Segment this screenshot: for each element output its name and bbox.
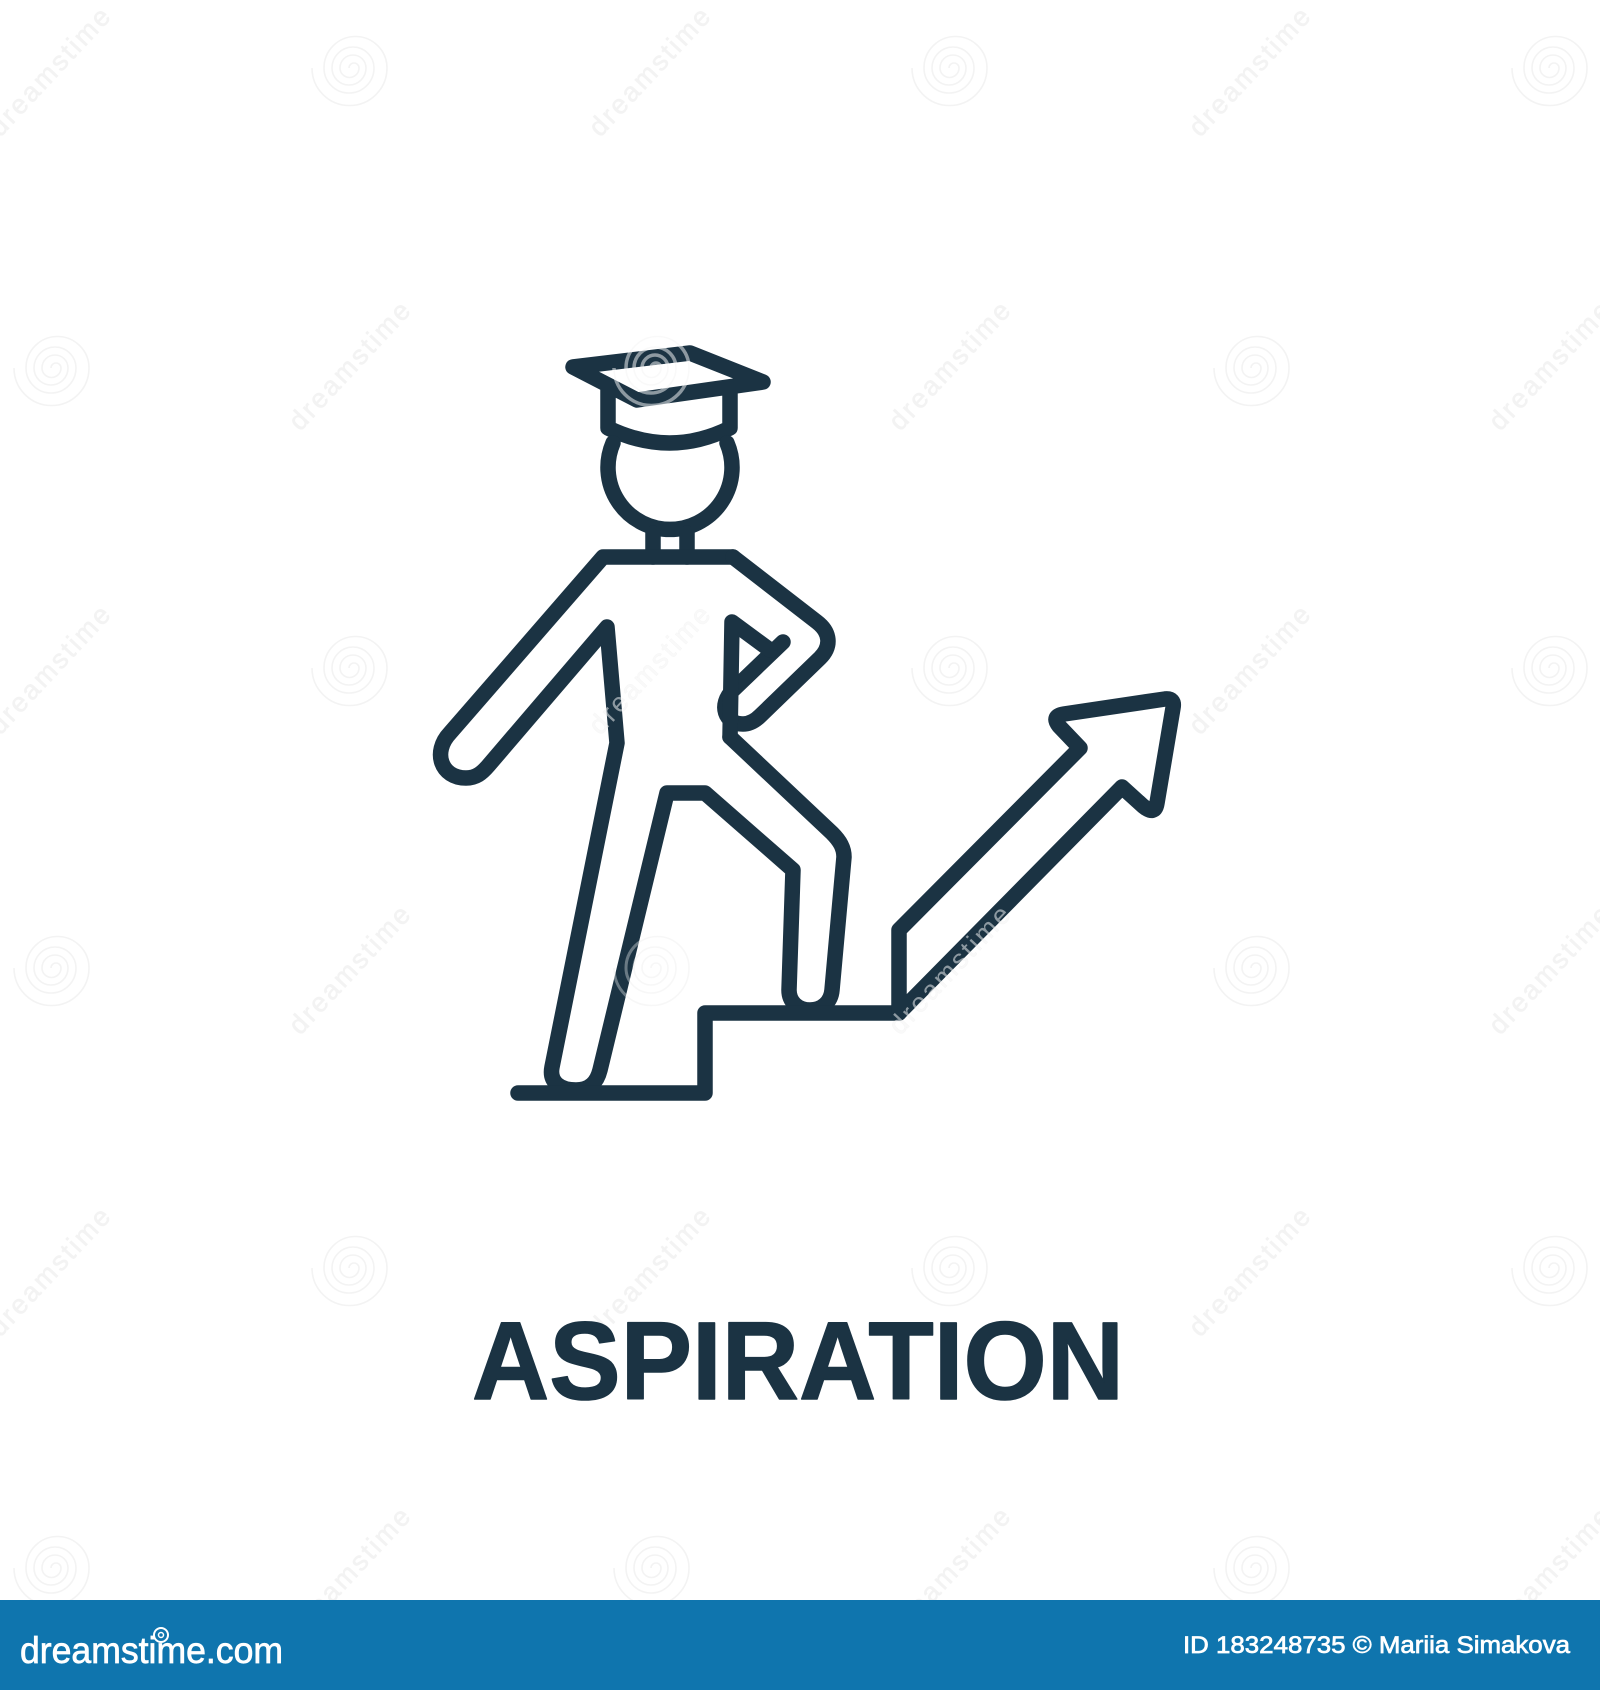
shoulders, left arm and standing leg: [441, 557, 844, 1090]
watermark overlay on icon: dreamstime: [883, 900, 1016, 1040]
footer bar: [0, 1600, 1600, 1690]
elbow gap triangle: [730, 622, 770, 737]
neck: [653, 533, 687, 557]
footer credit: ID 183248735 © Mariia Simakova: [1183, 1632, 1571, 1659]
watermark text: dreamstime: [583, 600, 716, 740]
watermark text: dreamstime: [1183, 2, 1316, 142]
footer logo: dreamstime.com: [20, 1630, 283, 1671]
head: [608, 443, 732, 529]
watermark text: dreamstime: [283, 1502, 416, 1642]
watermark text: dreamstime: [1183, 1202, 1316, 1342]
watermark text: dreamstime: [583, 2, 716, 142]
watermark text: dreamstime: [883, 1502, 1016, 1642]
watermark text: dreamstime: [283, 900, 416, 1040]
watermark text: dreamstime: [283, 296, 416, 436]
watermark text: dreamstime: [583, 1202, 716, 1342]
watermark text: dreamstime: [883, 296, 1016, 436]
rising arrow: [899, 699, 1173, 1013]
icon: graduate climbing a step with rising arrow: [441, 353, 1173, 1093]
graduation cap: [573, 353, 763, 443]
title: ASPIRATION: [472, 1300, 1124, 1423]
watermark overlay on icon: dreamstime: [583, 600, 716, 740]
watermark text: dreamstime: [883, 900, 1016, 1040]
right arm on hip: [725, 557, 828, 724]
watermark overlay on icon: [583, 336, 1016, 1040]
watermark text: dreamstime: [1183, 600, 1316, 740]
stairs: [518, 1013, 899, 1093]
